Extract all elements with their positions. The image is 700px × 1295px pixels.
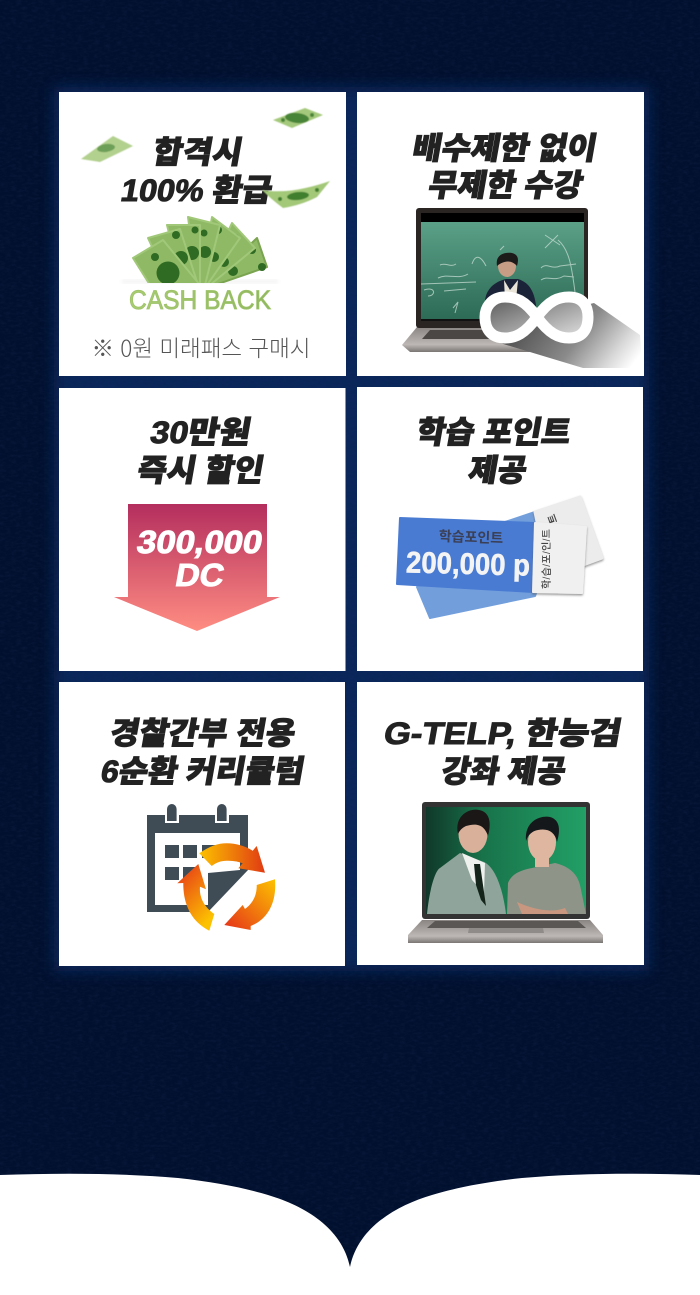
note: zero won pass: ※ 0원 미래패스 구매시 [92, 332, 310, 364]
panel: unlimited lectures [357, 92, 644, 376]
heading: unlimited [410, 131, 600, 203]
icon: tickets: 학습포인트 [439, 528, 504, 546]
icon: down arrow with price [114, 504, 280, 631]
icon: flying banknotes [81, 108, 330, 208]
panel: exclusive curriculum [59, 682, 345, 966]
icon: infinity with shadow [485, 297, 642, 368]
heading: points [414, 415, 574, 488]
icon: calendar [147, 804, 248, 912]
panel: 100% refund [59, 92, 346, 376]
heading: refund: 합격시 [150, 135, 245, 170]
icon: down arrow with price: DC [173, 557, 227, 593]
heading: courses: G-TELP, 한능검 [381, 716, 624, 751]
icon: tickets: 트 [546, 512, 560, 525]
image: laptop with instructors [408, 802, 603, 943]
icon: tickets: 200,000 p [406, 546, 530, 583]
icon: cash fan [122, 217, 278, 285]
image: laptop with lecture [402, 208, 610, 352]
heading: discount: 30만원 [148, 415, 254, 450]
heading: curriculum: 6순환 커리큘럼 [98, 754, 307, 789]
heading: curriculum [98, 716, 307, 789]
icon: tickets [397, 497, 602, 618]
left instructor [427, 810, 506, 914]
heading: curriculum: 경찰간부 전용 [107, 716, 298, 751]
panel: instant discount [59, 388, 346, 671]
heading: unlimited: 무제한 수강 [426, 168, 586, 203]
icon: cycle arrows [177, 843, 275, 931]
icon: down arrow with price: 300,000 [134, 524, 266, 560]
heading: refund [118, 135, 275, 208]
heading: refund: 100% 환급 [118, 173, 275, 208]
lecturer [485, 253, 536, 322]
heading: unlimited: 배수제한 없이 [410, 131, 600, 166]
heading: courses: 강좌 제공 [439, 754, 569, 789]
heading: points: 제공 [466, 453, 530, 488]
right instructor [507, 817, 586, 914]
bottom white curved section [0, 1174, 700, 1295]
icon: tickets: 학/습/포/인/트 [540, 529, 553, 589]
panel: extra courses [357, 682, 644, 965]
heading: discount [135, 415, 267, 488]
heading: discount: 즉시 할인 [135, 453, 267, 488]
panel: study points [357, 387, 643, 671]
label: cash back: CASH BACK [129, 285, 271, 315]
heading: points: 학습 포인트 [414, 415, 574, 450]
heading: courses [381, 716, 624, 789]
